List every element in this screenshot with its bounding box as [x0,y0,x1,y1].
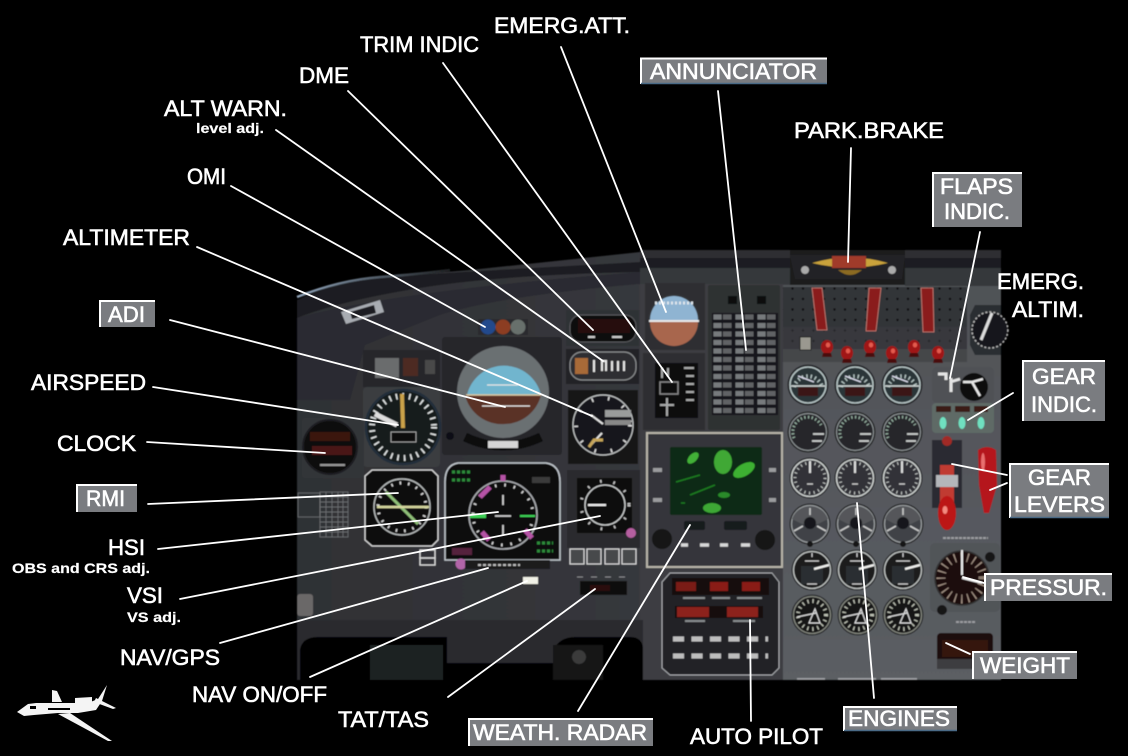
cockpit instrument panel [297,250,1008,680]
instrument: RMI [365,470,438,546]
leader line: emerg att [561,47,666,312]
mode buttons [570,549,636,564]
label: HSI with OBS and CRS adj. [12,535,150,576]
leader line: clock [147,442,325,453]
label: VSI with VS adj.: VSI [127,583,163,608]
label: GEAR LEVERS [1009,463,1109,518]
leader line: DME [348,91,593,330]
leader line: OMI [231,186,485,327]
emergency altimeter [970,305,1008,355]
label: CLOCK: CLOCK [57,431,136,456]
leader line: NAV on/off [310,581,527,677]
label: AIRSPEED: AIRSPEED [31,370,146,395]
instrument: airspeed [363,387,440,467]
label: ADI [99,300,155,327]
instrument: annunciator switch block [363,350,440,387]
leader line: annunciator [718,91,746,350]
label: GEAR INDIC.: INDIC. [1031,392,1097,417]
label: HSI with OBS and CRS adj.: HSI [108,535,145,560]
label: RMI [76,484,137,512]
lower panel shade [297,620,643,680]
label: ALT WARN. with level adj.: level adj. [196,120,264,136]
label: DME: DME [299,63,349,88]
label: GEAR INDIC. [1022,360,1105,421]
decorative grid label plate [298,492,348,537]
leader line: HSI [158,512,498,549]
panel: center stack [640,283,783,680]
label: GEAR LEVERS: LEVERS [1014,492,1105,517]
leader line: trim indic [443,63,672,382]
leader line: TAT/TAS [448,589,595,697]
vent [341,300,384,324]
label: ADI: ADI [108,302,145,327]
label: EMERG. ALTIM. [997,269,1084,322]
label: ALT WARN. with level adj.: ALT WARN. [164,96,287,121]
leader line: gear indic [968,393,1013,420]
knee cutouts [300,637,643,680]
label: ANNUNCIATOR: ANNUNCIATOR [650,59,817,84]
leader line: gear levers [952,464,1007,490]
dotted switch panel [783,287,967,349]
red gear handle [978,447,997,513]
label: PRESSUR.: PRESSUR. [990,575,1107,600]
weight display [937,633,993,669]
red guard levers [812,288,934,332]
panel: engine section [783,285,1001,680]
autopilot unit [662,573,779,675]
label: VSI with VS adj. [127,583,181,625]
leader line: park brake [848,148,851,262]
leader line: weight [946,643,970,654]
leader line: alt warn [276,130,603,361]
faint placards [797,538,988,679]
leader line: VSI [180,516,600,599]
leader line: airspeed [153,387,398,425]
label: EMERG. ALTIM.: EMERG. [997,269,1084,294]
label: NAV/GPS: NAV/GPS [120,645,220,670]
label: WEIGHT: WEIGHT [980,653,1070,678]
label: WEATH. RADAR: WEATH. RADAR [473,720,647,745]
instrument: DME [566,310,639,346]
leader line: weather radar [578,525,690,711]
instrument: altitude warning [566,349,639,384]
engine gauges [788,364,924,636]
label: FLAPS INDIC.: INDIC. [944,199,1010,224]
label: FLAPS INDIC.: FLAPS [940,174,1013,199]
leader line: NAV/GPS [220,568,488,643]
NAV on/off switch [523,577,538,584]
instrument: VSI [567,470,640,548]
gear indicator lights [932,403,994,433]
instrument: HSI [445,463,560,570]
leader line: pressurization [963,577,984,583]
glareshield top rail [297,250,1001,318]
right small vent [297,594,313,616]
label: PARK.BRAKE: PARK.BRAKE [794,118,944,143]
leader line: altimeter [197,247,592,416]
panel: main fascia [297,250,1001,680]
leader line: ADI [170,320,505,407]
label: VSI with VS adj.: VS adj. [127,609,181,625]
left upper shadow [297,272,640,400]
label: ALTIMETER: ALTIMETER [63,225,190,250]
label: EMERG.ATT.: EMERG.ATT. [494,13,630,38]
label: RMI: RMI [86,486,125,511]
label: AUTO PILOT: AUTO PILOT [690,724,823,749]
toggle switch [800,337,811,350]
label: FLAPS INDIC. [932,172,1022,227]
annunciator panel [708,285,780,430]
pressurization gauge [930,543,1000,615]
label: TRIM INDIC: TRIM INDIC [360,32,479,57]
label: GEAR LEVERS: GEAR [1028,465,1091,490]
instrument: altimeter [568,390,638,464]
TAT/TAS display [577,577,627,595]
label: NAV ON/OFF: NAV ON/OFF [192,682,327,707]
icon: business jet [17,685,116,741]
label: ALT WARN. with level adj. [164,96,287,136]
instrument: emergency attitude [645,283,705,350]
label: ENGINES: ENGINES [848,706,950,731]
small stacked switch [420,550,435,565]
instrument: OMI lights [478,319,528,335]
label: TAT/TAS: TAT/TAS [338,707,429,732]
gear lever assembly [932,436,962,530]
leader line: RMI [148,493,398,504]
instrument: clock [302,418,364,478]
red rotary knobs [821,340,944,363]
flaps indicator [932,367,994,403]
label: EMERG. ALTIM.: ALTIM. [1012,297,1084,322]
parking brake handle [790,255,905,279]
leader line: engines [857,503,874,698]
instrument: ADI [442,337,562,455]
label: GEAR INDIC.: GEAR [1032,364,1096,389]
weather radar unit [647,433,782,567]
leader line: flaps [950,232,980,378]
label: OMI: OMI [187,164,226,189]
leader line: auto pilot [750,620,751,721]
label: HSI with OBS and CRS adj.: OBS and CRS adj. [12,560,150,576]
instrument: trim indicator [643,353,705,430]
